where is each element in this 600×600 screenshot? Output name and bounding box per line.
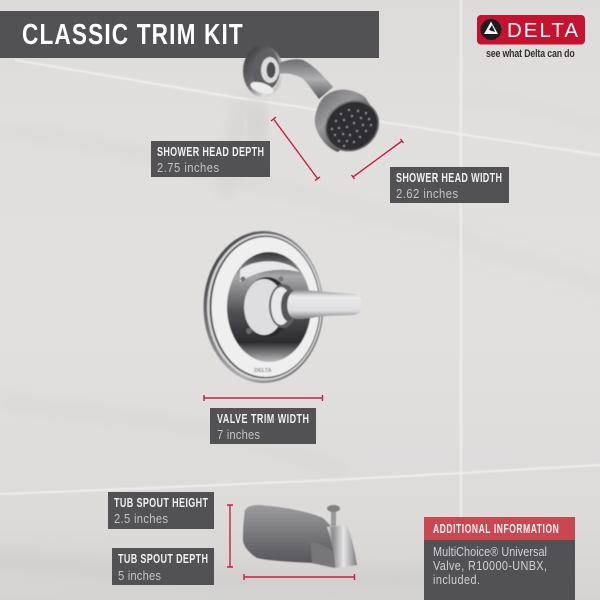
label: tub spout height: TUB SPOUT HEIGHT	[114, 497, 208, 510]
dimension line: shower head width	[352, 139, 404, 179]
label: valve trim width: VALVE TRIM WIDTH	[217, 413, 309, 426]
panel: additional information: included.	[433, 573, 480, 587]
dimension line: tub spout height	[227, 505, 233, 567]
panel: additional information: ADDITIONAL INFORMATION	[433, 522, 559, 537]
label: shower head width	[390, 167, 509, 203]
label: shower head width: 2.62 inches	[396, 186, 458, 201]
logo: Delta	[477, 15, 585, 60]
label: tub spout depth	[112, 548, 214, 585]
label: tub spout depth: 5 inches	[118, 568, 161, 583]
dimension line: valve trim width	[204, 395, 322, 401]
logo: Delta: see what Delta can do	[486, 48, 575, 60]
label: tub spout height: 2.5 inches	[114, 511, 168, 526]
label: valve trim width	[210, 408, 316, 444]
shower arm and flange	[243, 45, 333, 153]
panel: additional information	[424, 517, 575, 600]
tub spout	[243, 505, 357, 568]
logo: Delta: DELTA	[507, 19, 578, 42]
panel: additional information: MultiChoice® Universal	[433, 545, 547, 559]
title banner	[0, 11, 379, 58]
label: shower head depth: SHOWER HEAD DEPTH	[157, 146, 264, 159]
spray nozzles	[331, 109, 372, 147]
title banner: CLASSIC TRIM KIT	[22, 17, 243, 51]
dimension line: shower head depth	[271, 117, 320, 180]
label: shower head depth: 2.75 inches	[157, 160, 219, 175]
label: shower head depth	[151, 141, 270, 177]
label: shower head width: SHOWER HEAD WIDTH	[396, 172, 502, 185]
label: tub spout height	[108, 492, 214, 529]
shower head	[315, 90, 389, 162]
label: tub spout depth: TUB SPOUT DEPTH	[118, 553, 208, 566]
label: valve trim width: 7 inches	[217, 427, 260, 442]
valve trim and handle	[204, 231, 362, 383]
panel: additional information: Valve, R10000-UNBX,	[433, 559, 547, 573]
dimension line: tub spout depth	[244, 574, 354, 580]
valve trim and handle: DELTA	[254, 368, 272, 374]
